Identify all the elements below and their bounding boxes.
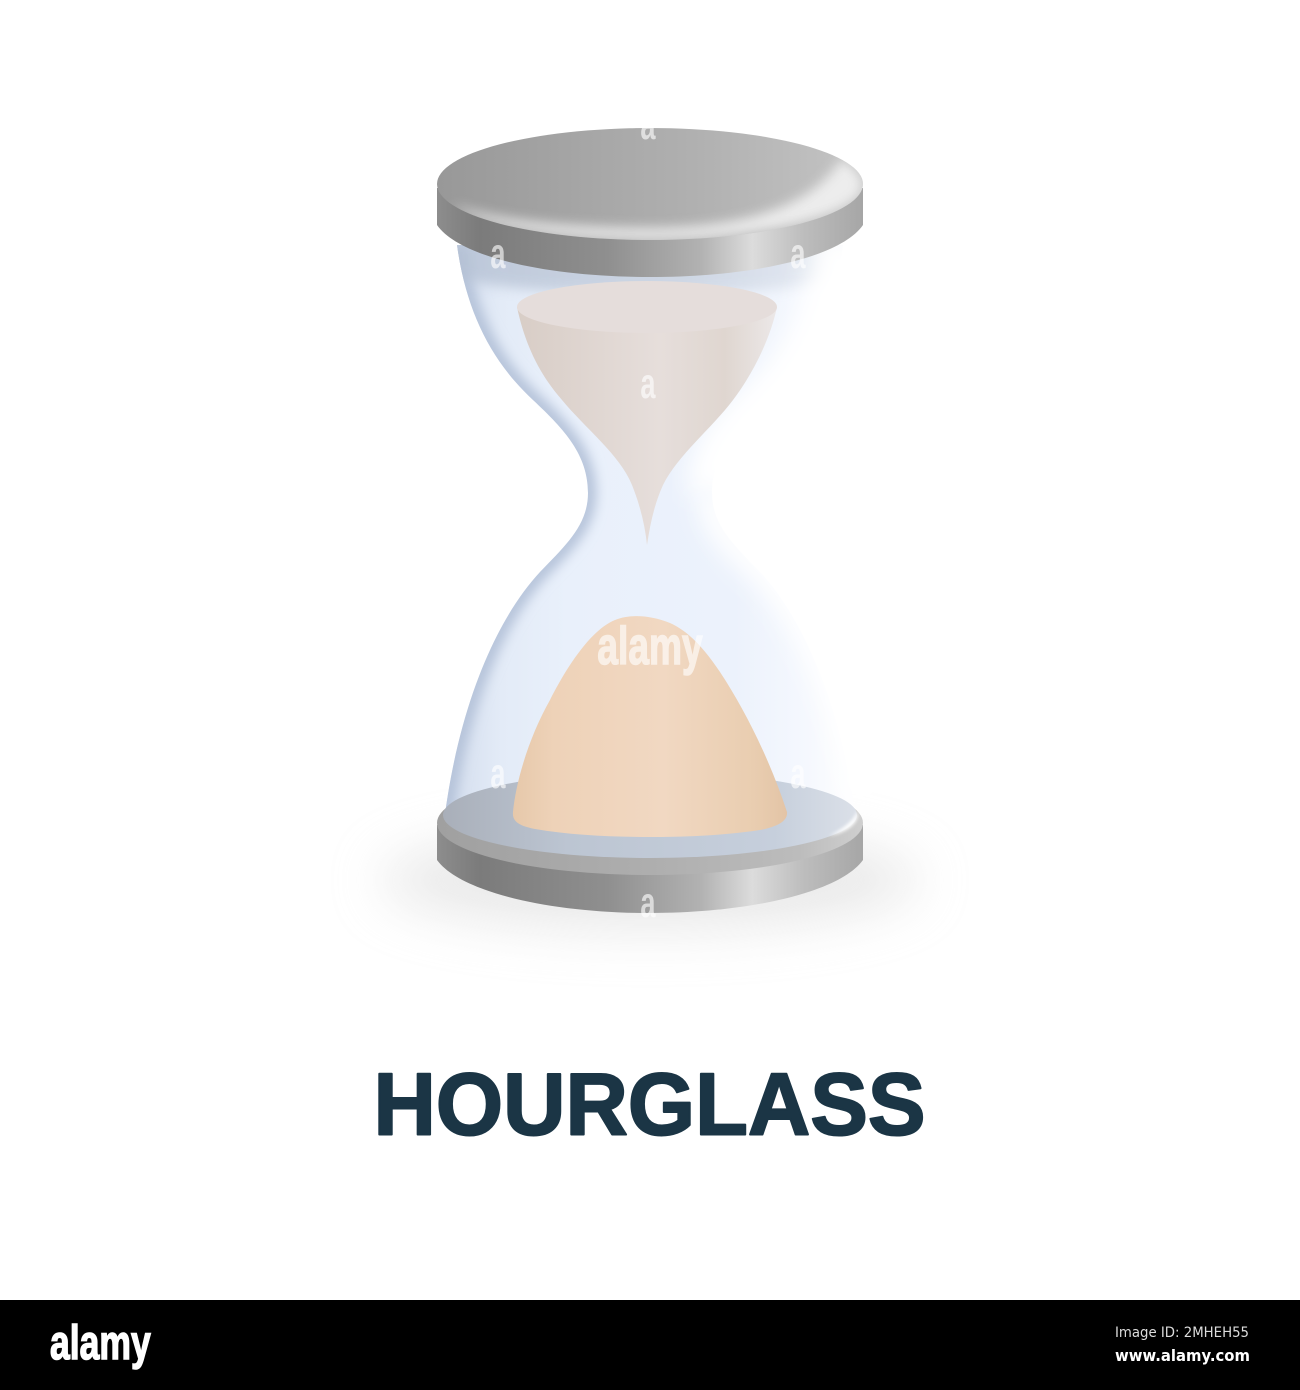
- glass left edge shade: [443, 240, 850, 830]
- glass bulb: [443, 245, 857, 830]
- base highlight: [829, 811, 858, 836]
- base band: [437, 825, 863, 913]
- watermarks: [490, 101, 806, 927]
- ground shadow: [380, 830, 920, 930]
- watermarks: alamy: [597, 616, 703, 676]
- watermarks: a: [640, 879, 656, 927]
- base face: [443, 772, 857, 858]
- footer bar: [0, 1300, 1300, 1390]
- bottom sand: [513, 616, 787, 837]
- glass shade under cap: [457, 245, 816, 294]
- watermarks: a: [640, 360, 656, 408]
- top sand surface: [517, 281, 777, 333]
- glass right edge fade upper: [712, 235, 843, 493]
- watermarks: a: [640, 101, 656, 149]
- title: HOURGLASS: [374, 1054, 926, 1154]
- base rim: [437, 771, 863, 875]
- watermarks: a: [790, 230, 806, 278]
- top cap highlight: [452, 158, 863, 240]
- alamy logo: alamy: [50, 1316, 151, 1369]
- top cap: [437, 128, 863, 277]
- hourglass: [437, 128, 866, 913]
- watermarks: a: [490, 230, 506, 278]
- glass right edge fade lower: [712, 493, 866, 800]
- top sand body: [517, 307, 777, 545]
- image id: Image ID: 2MHEH55: [1115, 1325, 1249, 1341]
- top sand: [517, 281, 777, 545]
- top cap face: [437, 128, 863, 240]
- top cap band: [437, 188, 863, 277]
- watermarks: a: [790, 750, 806, 798]
- base cap: [437, 771, 863, 913]
- watermarks: a: [490, 750, 506, 798]
- website: www.alamy.com: [1115, 1346, 1250, 1365]
